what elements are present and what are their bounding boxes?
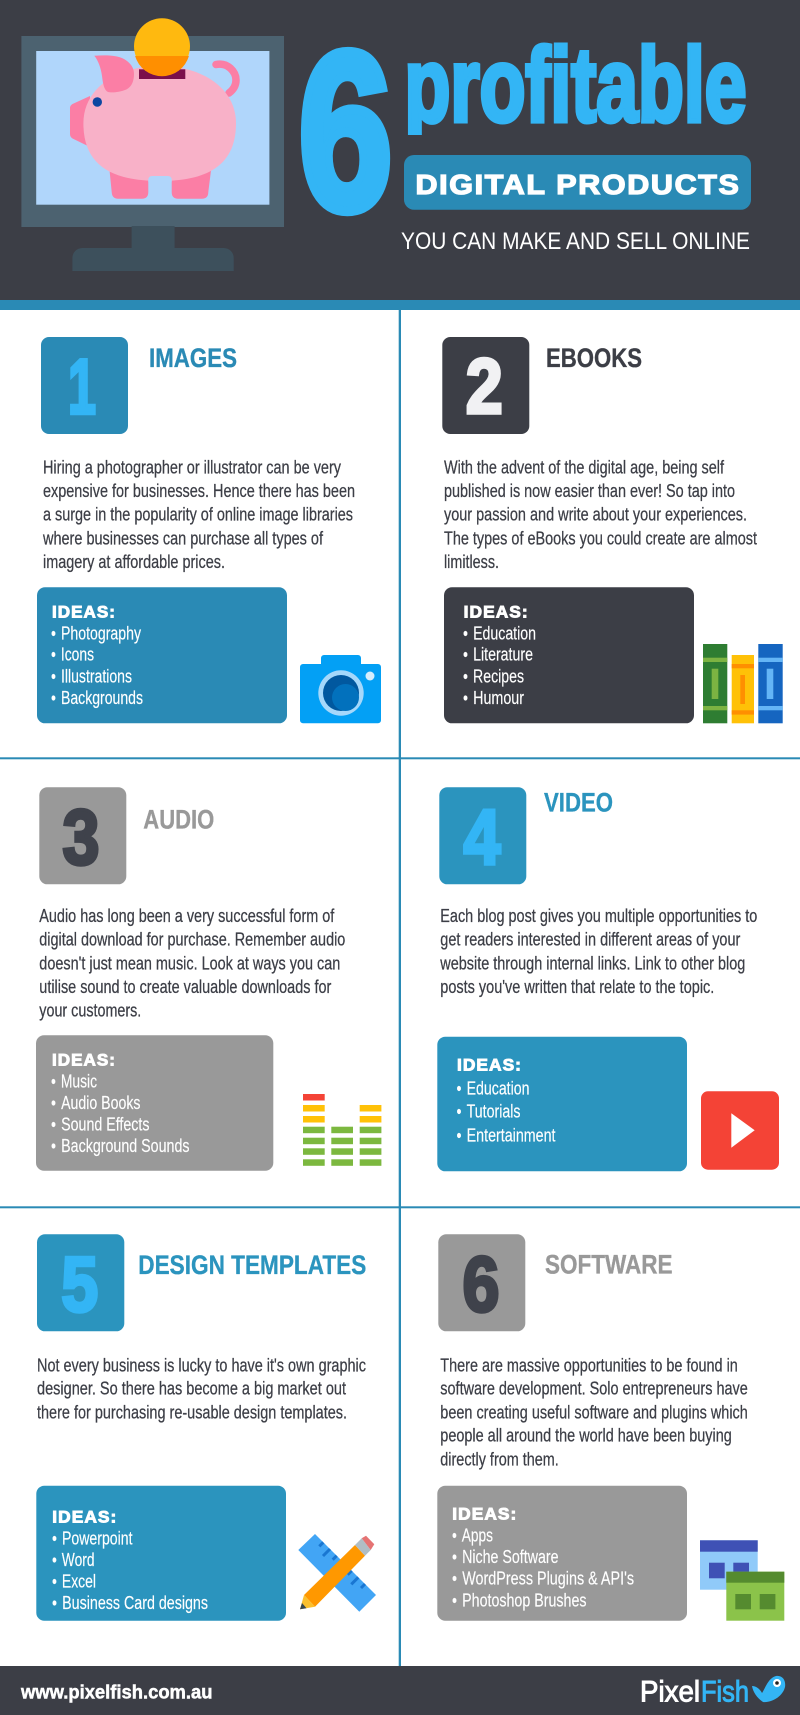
ideas box: • Recipes	[463, 666, 524, 686]
body text: doesn't just mean music. Look at ways you can	[39, 953, 340, 973]
body text	[440, 1355, 748, 1469]
ideas box: • Apps	[452, 1525, 493, 1545]
ideas box	[444, 587, 694, 723]
ideas box: IDEAS:	[452, 1506, 517, 1524]
ideas box: IDEAS:	[52, 1052, 116, 1070]
body text	[37, 1355, 366, 1422]
icon: ruler and pencil	[298, 1534, 376, 1612]
ideas box: • Audio Books	[51, 1093, 140, 1113]
ideas box	[437, 1486, 687, 1621]
body text: With the advent of the digital age, being self	[444, 457, 725, 477]
number badge 2	[442, 337, 529, 434]
body text: Audio has long been a very successful form of	[39, 906, 335, 926]
icon: camera	[300, 655, 381, 723]
number badge 1	[41, 337, 128, 434]
ideas box: • Literature	[463, 645, 533, 665]
number badge 3	[39, 787, 126, 884]
ideas box: • Education	[456, 1078, 530, 1098]
website url: www.pixelfish.com.au	[20, 1681, 212, 1703]
number badge 1: 1	[68, 342, 96, 430]
ideas box: • Background Sounds	[51, 1136, 190, 1156]
panel: 4 video	[437, 787, 779, 1171]
ideas box: • Niche Software	[452, 1547, 558, 1567]
icon: books	[703, 644, 783, 723]
ideas box: • WordPress Plugins & API's	[452, 1569, 634, 1589]
ideas box: • Powerpoint	[52, 1528, 132, 1548]
logo: PixelFish	[640, 1676, 785, 1709]
body text	[444, 457, 757, 572]
banner: digital products	[404, 155, 751, 210]
number badge 5	[37, 1234, 124, 1331]
number badge 6	[438, 1234, 525, 1331]
body text	[42, 457, 355, 572]
panel: header	[0, 0, 800, 310]
subtitle: YOU CAN MAKE AND SELL ONLINE	[401, 228, 750, 255]
heading: images: IMAGES	[149, 343, 237, 373]
number badge 2: 2	[466, 342, 503, 430]
panel: 1 images	[37, 337, 381, 723]
heading: design templates: DESIGN TEMPLATES	[138, 1250, 366, 1280]
ideas box: • Business Card designs	[52, 1593, 208, 1613]
body text: published is now easier than ever! So tap into	[444, 481, 735, 501]
heading: software: SOFTWARE	[545, 1249, 672, 1279]
body text: imagery at affordable prices.	[43, 552, 225, 572]
body text: people all around the world have been buying	[440, 1426, 732, 1446]
panel: footer	[0, 1666, 800, 1715]
heading: video: VIDEO	[544, 787, 613, 817]
banner: digital products: DIGITAL PRODUCTS	[416, 169, 740, 200]
panel: 6 software	[437, 1234, 784, 1621]
panel: 5 design templates	[36, 1234, 376, 1621]
heading: audio: AUDIO	[143, 805, 214, 835]
body text	[439, 906, 757, 997]
ideas box: • Excel	[52, 1572, 96, 1592]
body text	[39, 906, 345, 1020]
ideas box: • Photography	[51, 623, 141, 643]
number badge 3: 3	[62, 793, 100, 881]
panel: 2 ebooks	[442, 337, 783, 723]
icon: software windows	[700, 1540, 784, 1621]
ideas box: • Word	[52, 1550, 94, 1570]
logo: PixelFish: Pixel	[640, 1676, 700, 1709]
body text: your customers.	[39, 1000, 141, 1020]
body text: a surge in the popularity of online image libraries	[43, 505, 353, 525]
number badge 4: 4	[464, 793, 500, 881]
heading: ebooks: EBOOKS	[546, 343, 642, 373]
ideas box: • Education	[463, 623, 536, 643]
body text: utilise sound to create valuable downloads for	[39, 977, 331, 997]
ideas box: IDEAS:	[52, 1508, 117, 1526]
ideas box	[37, 587, 287, 723]
icon: monitor with piggy bank	[21, 18, 284, 271]
logo: PixelFish: Fish	[701, 1676, 749, 1709]
big number 6: 6	[298, 5, 392, 257]
body text: limitless.	[444, 552, 499, 572]
body text: posts you've written that relate to the topic.	[440, 977, 714, 997]
ideas box	[437, 1037, 687, 1171]
body text: digital download for purchase. Remember audio	[39, 930, 345, 950]
body text: Not every business is lucky to have it's own graphic	[37, 1355, 366, 1375]
number badge 6: 6	[462, 1240, 500, 1328]
panel: 3 audio	[36, 787, 381, 1171]
ideas box: • Photoshop Brushes	[452, 1590, 586, 1610]
body text: expensive for businesses. Hence there has been	[43, 481, 355, 501]
body text: designer. So there has become a big market out	[37, 1379, 346, 1399]
icon: audio equalizer	[303, 1094, 381, 1166]
body text: where businesses can purchase all types of	[42, 528, 324, 548]
body text: Hiring a photographer or illustrator can be very	[43, 457, 341, 477]
ideas box: • Music	[51, 1071, 97, 1091]
ideas box: • Illustrations	[51, 666, 132, 686]
ideas box: • Icons	[51, 645, 94, 665]
ideas box	[36, 1035, 273, 1171]
ideas box: IDEAS:	[52, 604, 116, 622]
ideas box: • Sound Effects	[51, 1115, 150, 1135]
ideas box: • Entertainment	[456, 1125, 556, 1145]
ideas box	[36, 1486, 286, 1621]
number badge 4	[439, 787, 526, 884]
ideas box: • Tutorials	[456, 1102, 520, 1122]
icon: play button	[701, 1091, 779, 1170]
body text: there for purchasing re-usable design templates.	[37, 1402, 347, 1422]
number badge 5: 5	[61, 1240, 98, 1328]
ideas box: IDEAS:	[457, 1057, 522, 1075]
body text: directly from them.	[440, 1449, 559, 1469]
ideas box: • Humour	[463, 688, 524, 708]
ideas box: • Backgrounds	[51, 688, 143, 708]
ideas box: IDEAS:	[464, 604, 529, 622]
